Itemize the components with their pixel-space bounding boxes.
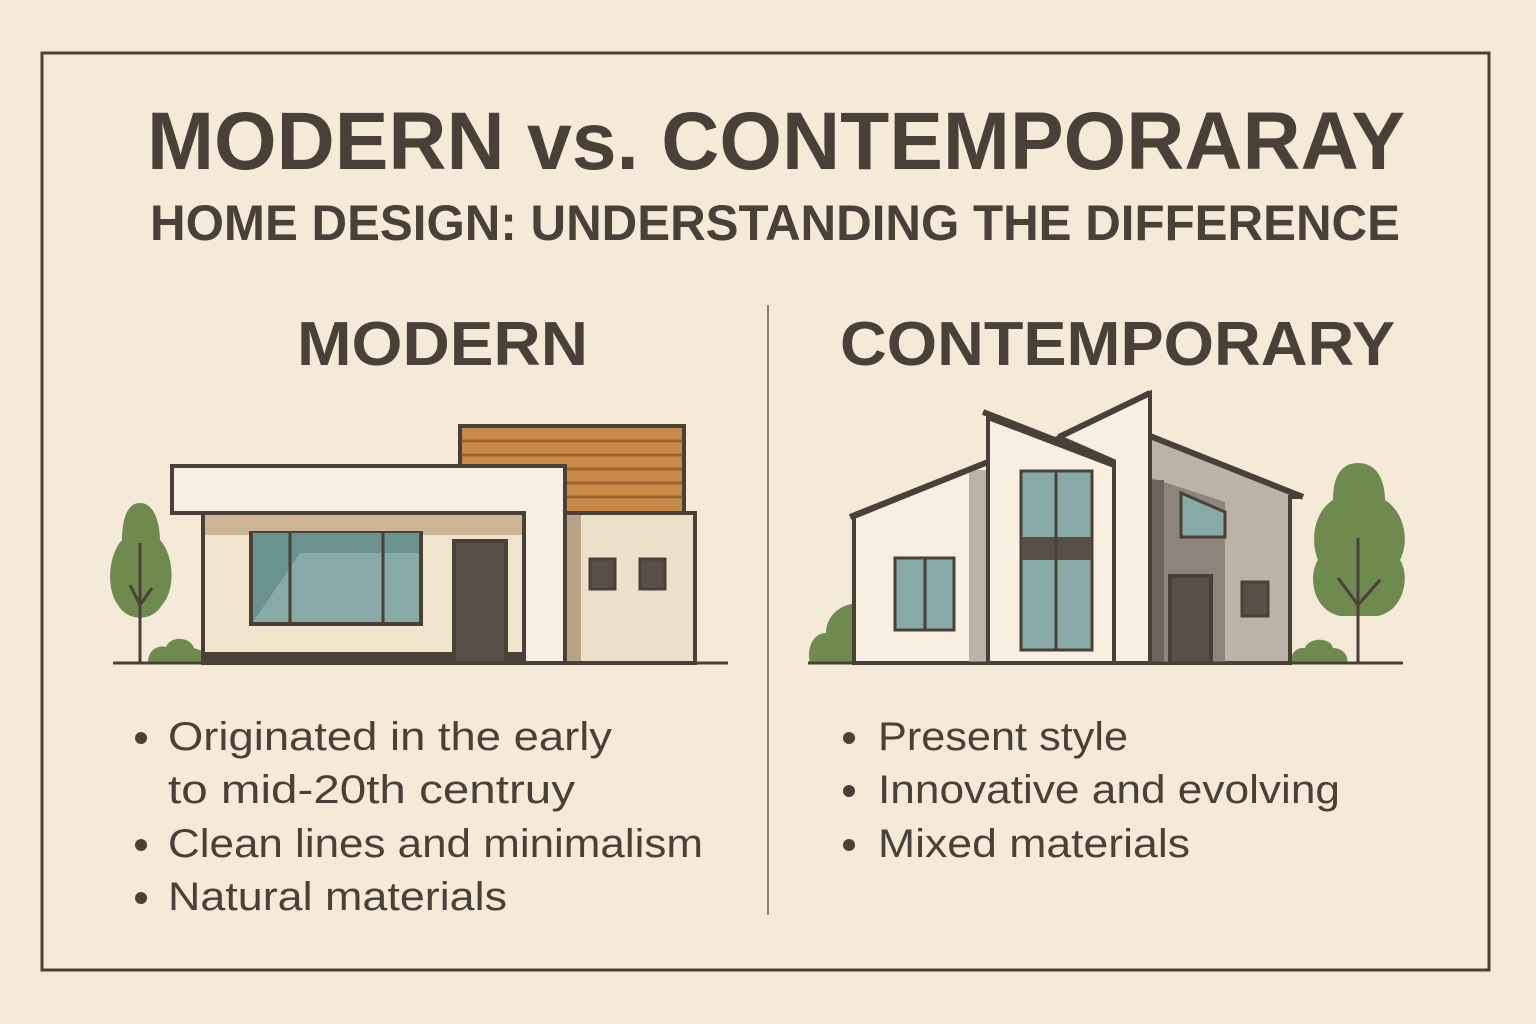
bullets: modern: Originated in the early [168,715,612,759]
right block [565,513,695,663]
icon: bushes & tree [809,604,899,663]
icon: tree left [110,503,205,663]
bullets: contemporary: Present style [878,715,1128,759]
bullets: modern: Natural materials [168,875,507,919]
heading: modern: MODERN [297,310,588,379]
illustration: contemporary house [808,393,1405,663]
bullets: modern: to mid-20th centruy [168,768,575,812]
title: MODERN vs. CONTEMPORARAY [147,96,1405,187]
subtitle: HOME DESIGN: UNDERSTANDING THE DIFFERENCE [150,195,1400,251]
ground [808,662,1403,664]
bullets: modern: Clean lines and minimalism [168,822,703,866]
main wall [203,513,525,663]
ground [113,662,728,664]
illustration: modern house [110,426,728,663]
right wing [1150,437,1301,663]
wood box [460,426,684,516]
bullets: contemporary: Innovative and evolving [878,768,1340,812]
tall center [988,418,1114,663]
back panel [1059,393,1150,663]
door [454,541,506,663]
triangle window [1181,493,1225,537]
left wing [854,463,988,663]
bullets: contemporary [843,715,1340,866]
window [251,533,421,624]
bullets: modern [135,715,703,919]
bullets: contemporary: Mixed materials [878,822,1190,866]
white beam [172,466,565,663]
heading: contemporary: CONTEMPORARY [840,310,1395,379]
